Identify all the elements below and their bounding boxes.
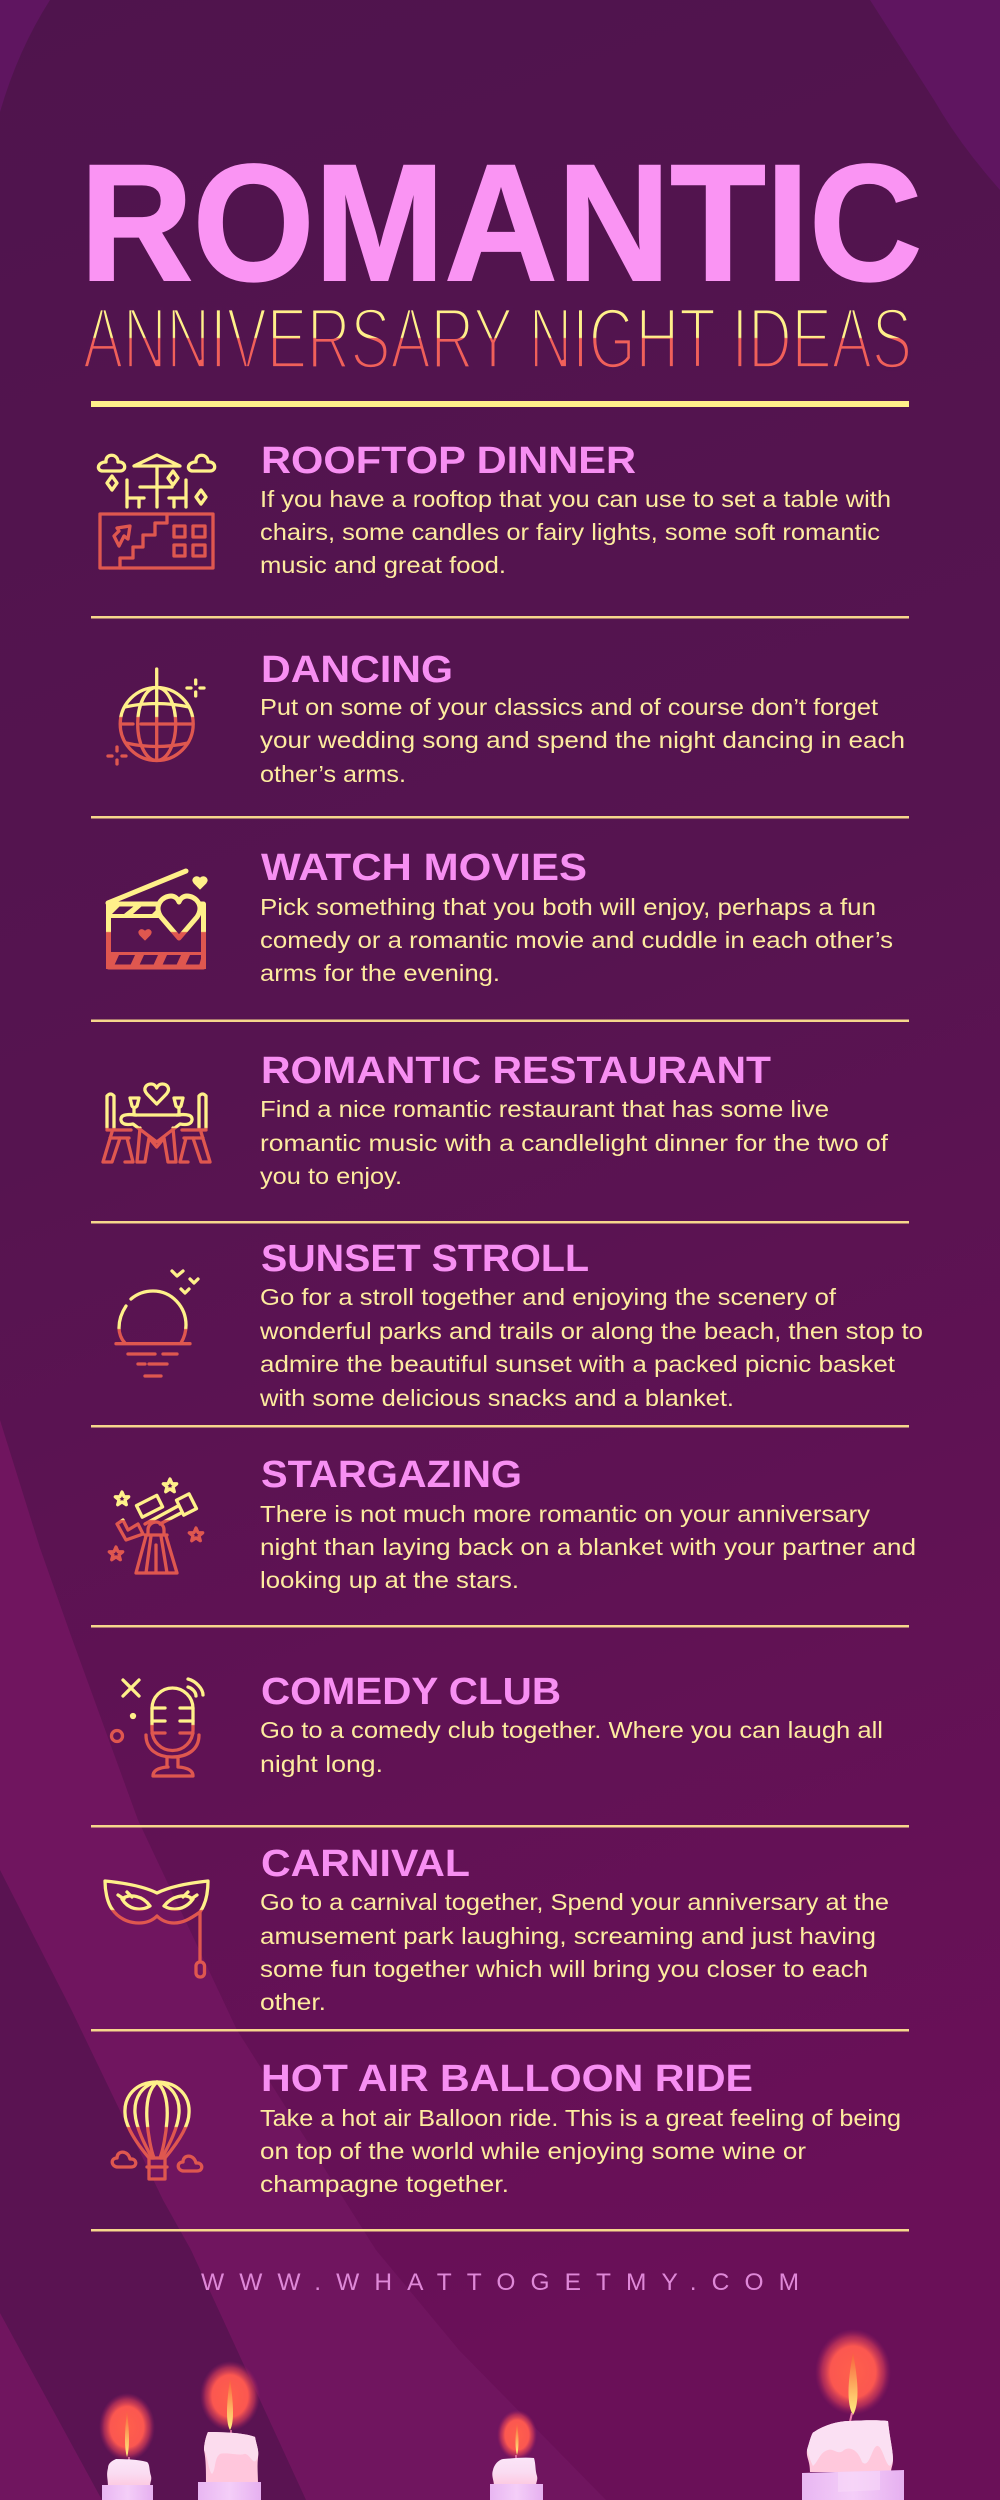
description: music and great food. <box>260 552 506 578</box>
title: ROMANTIC <box>80 131 922 316</box>
description <box>260 2105 901 2197</box>
panel: carnival <box>105 1843 889 2015</box>
panel: comedy club <box>112 1671 883 1777</box>
description: with some delicious snacks and a blanket. <box>259 1385 734 1411</box>
description: amusement park laughing, screaming and just having <box>260 1923 876 1949</box>
heading: CARNIVAL <box>261 1843 470 1885</box>
candle 3 <box>490 2410 543 2500</box>
icon: rooftop dinner <box>98 455 215 568</box>
description: romantic music with a candlelight dinner for the two of <box>260 1130 889 1156</box>
description: Pick something that you both will enjoy, perhaps a fun <box>260 894 876 920</box>
description <box>260 1889 889 2015</box>
description: champagne together. <box>260 2171 509 2197</box>
divider 5 <box>91 1425 909 1428</box>
divider 4 <box>91 1221 909 1224</box>
description: night long. <box>260 1751 383 1777</box>
description: night than laying back on a blanket with your partner and <box>260 1534 916 1560</box>
description: Go to a carnival together, Spend your anniversary at the <box>260 1889 889 1915</box>
icon: clapperboard <box>106 871 207 969</box>
description: Go to a comedy club together. Where you can laugh all <box>260 1717 883 1743</box>
description: Find a nice romantic restaurant that has some live <box>260 1096 829 1122</box>
divider 8 <box>91 2029 909 2032</box>
divider 1 <box>91 616 909 618</box>
description: Put on some of your classics and of course don’t forget <box>260 694 879 720</box>
header rule <box>91 401 909 407</box>
description: on top of the world while enjoying some wine or <box>260 2138 806 2164</box>
description: wonderful parks and trails or along the beach, then stop to <box>259 1318 923 1344</box>
heading: WATCH MOVIES <box>261 847 587 889</box>
heading: HOT AIR BALLOON RIDE <box>261 2058 753 2100</box>
icon: hot air balloon <box>112 2082 202 2179</box>
heading: ROMANTIC RESTAURANT <box>261 1050 771 1092</box>
panel: rooftop dinner <box>98 440 891 578</box>
description <box>260 1096 889 1189</box>
icon: mask <box>105 1881 208 1977</box>
candle 2 <box>198 2361 261 2500</box>
panel: romantic restaurant <box>103 1050 889 1189</box>
description <box>260 694 905 787</box>
candle 1 <box>99 2393 155 2500</box>
description: There is not much more romantic on your anniversary <box>260 1501 871 1527</box>
divider 2 <box>91 816 909 818</box>
panel: hot air balloon ride <box>112 2058 901 2197</box>
icon: restaurant table <box>103 1084 210 1162</box>
description <box>260 1501 916 1593</box>
icon: telescope <box>109 1479 203 1573</box>
description: looking up at the stars. <box>260 1567 519 1593</box>
description: admire the beautiful sunset with a packed picnic basket <box>260 1351 896 1377</box>
description: Take a hot air Balloon ride. This is a great feeling of being <box>260 2105 901 2131</box>
heading: SUNSET STROLL <box>261 1238 589 1280</box>
divider 9 <box>91 2229 909 2232</box>
candle 4 <box>802 2329 904 2500</box>
website url: WWW.WHATTOGETMY.COM <box>201 2269 799 2296</box>
description: arms for the evening. <box>260 960 500 986</box>
description: Go for a stroll together and enjoying the scenery of <box>260 1284 837 1310</box>
panel: stargazing <box>109 1454 916 1593</box>
description: comedy or a romantic movie and cuddle in each other’s <box>260 927 893 953</box>
description <box>260 486 891 578</box>
description: other. <box>260 1989 326 2015</box>
description <box>260 894 893 986</box>
divider 3 <box>91 1020 909 1022</box>
description: you to enjoy. <box>260 1163 402 1189</box>
divider 6 <box>91 1625 909 1628</box>
description: chairs, some candles or fairy lights, some soft romantic <box>260 519 880 545</box>
icon: sunset <box>116 1271 198 1376</box>
icon: disco ball <box>108 669 204 764</box>
panel: watch movies <box>106 847 893 986</box>
heading: COMEDY CLUB <box>261 1671 561 1713</box>
description <box>259 1284 923 1411</box>
heading: STARGAZING <box>261 1454 522 1496</box>
description: If you have a rooftop that you can use to set a table with <box>260 486 891 512</box>
description: other’s arms. <box>260 761 406 787</box>
description: your wedding song and spend the night dancing in each <box>260 727 905 753</box>
divider 7 <box>91 1825 909 1828</box>
heading: DANCING <box>261 649 453 691</box>
description <box>260 1717 883 1777</box>
panel: sunset stroll <box>116 1238 923 1411</box>
icon: microphone <box>112 1679 203 1776</box>
heading: ROOFTOP DINNER <box>261 440 636 482</box>
description: some fun together which will bring you closer to each <box>260 1956 868 1982</box>
panel: dancing <box>108 649 905 787</box>
